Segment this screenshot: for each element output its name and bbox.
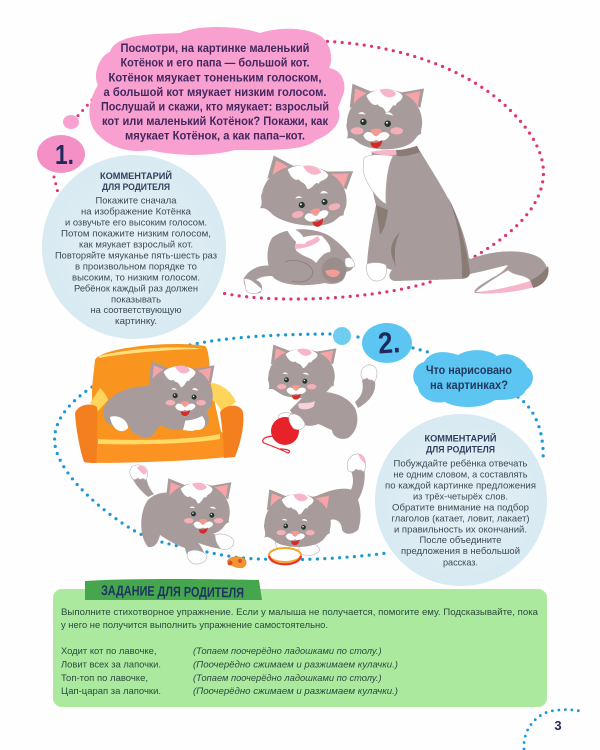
blue question text: на картинках? bbox=[430, 378, 508, 392]
yarn ball bbox=[263, 412, 305, 453]
illustration: kitten with milk bowl bbox=[264, 454, 366, 564]
verse action notes: (Топаем поочерёдно ладошками по столу.) bbox=[193, 646, 382, 657]
question text: кот или маленький Котёнок? Покажи, как bbox=[102, 114, 329, 128]
mouse kitten face bbox=[184, 507, 223, 534]
number badge 1 bbox=[37, 135, 85, 173]
number badge 2: 2. bbox=[377, 326, 401, 361]
comment text: Потом покажите низким голосом, bbox=[61, 228, 211, 238]
dotted connector: number 1 to comment bbox=[54, 177, 58, 193]
panel: task for the parent bbox=[53, 579, 547, 707]
comment text: из трёх-четырёх слов. bbox=[413, 491, 508, 501]
kitten face bbox=[288, 188, 343, 232]
blue question text bbox=[426, 363, 512, 392]
comment text: Покажите сначала bbox=[96, 195, 177, 205]
comment circle 1 bbox=[42, 155, 226, 339]
verse lines: Топ-топ по лавочке, bbox=[61, 673, 148, 684]
small blue bubble bbox=[333, 327, 351, 345]
big cat face bbox=[351, 112, 403, 148]
yarn kitten head bbox=[268, 345, 336, 398]
verse action notes bbox=[193, 646, 398, 697]
bowl kitten face bbox=[277, 519, 315, 545]
comment text: Ребёнок каждый раз должен bbox=[74, 283, 198, 293]
illustration: kitten with yarn bbox=[263, 345, 377, 453]
dotted path: section 2 bbox=[55, 334, 543, 560]
comment text: После объедините bbox=[420, 535, 502, 545]
number badge 1: 1. bbox=[55, 139, 74, 170]
illustration: kitten with mouse bbox=[130, 465, 247, 568]
comment heading bbox=[100, 170, 172, 193]
illustration: big cat bbox=[346, 84, 549, 293]
instruction text: Выполните стихотворное упражнение. Если у малыша не получается, помогите ему. Подсказывайте, пока bbox=[61, 607, 539, 618]
question text: мяукает Котёнок, а как папа–кот. bbox=[125, 129, 305, 143]
verse lines bbox=[61, 646, 161, 697]
comment text: и правильность их окончаний. bbox=[394, 524, 527, 534]
comment text: на изображение Котёнка bbox=[81, 207, 192, 217]
comment text: по каждой картинке предложения bbox=[385, 481, 536, 491]
comment text: глаголов (катает, ловит, лакает) bbox=[392, 513, 530, 523]
comment text: на соответствующую bbox=[90, 305, 182, 315]
comment text: и озвучьте его высоким голосом. bbox=[65, 217, 207, 227]
banner heading: ЗАДАНИЕ ДЛЯ РОДИТЕЛЯ bbox=[101, 582, 244, 600]
milk bowl bbox=[269, 548, 301, 564]
comment text: рассказ. bbox=[443, 557, 478, 567]
bowl kitten head bbox=[264, 489, 332, 547]
comment text: Побуждайте ребёнка отвечать bbox=[394, 458, 528, 468]
comment text: в произвольном порядке то bbox=[75, 262, 197, 272]
illustration: kitten on sofa bbox=[103, 361, 214, 437]
verse action notes: (Поочерёдно сжимаем и разжимаем кулачки.) bbox=[193, 686, 398, 697]
dotted connector: bubble to number 1 bbox=[67, 100, 92, 128]
question text: Котёнок мяукает тоненьким голоском, bbox=[108, 70, 322, 84]
banner heading bbox=[85, 579, 262, 600]
verse action notes: (Топаем поочерёдно ладошками по столу.) bbox=[193, 673, 382, 684]
comment text: предложения в небольшой bbox=[401, 546, 520, 556]
verse lines: Ловит всех за лапочки. bbox=[61, 660, 161, 670]
instruction text bbox=[61, 607, 539, 631]
comment circle 2 bbox=[375, 414, 547, 586]
speech cloud: pink question bbox=[89, 27, 344, 155]
comment heading: ДЛЯ РОДИТЕЛЯ bbox=[426, 444, 495, 456]
blue question text: Что нарисовано bbox=[426, 363, 512, 377]
sofa kitten head bbox=[146, 361, 214, 421]
question text: Котёнок и его папа — большой кот. bbox=[120, 56, 310, 70]
question text: Посмотри, на картинке маленький bbox=[120, 41, 310, 55]
comment text: показывать bbox=[111, 294, 161, 304]
comment text bbox=[385, 458, 536, 567]
comment heading bbox=[424, 432, 497, 456]
instruction text: у него не получится выполнить упражнение самостоятельно. bbox=[61, 620, 328, 631]
dotted path: section 1 bbox=[222, 41, 543, 299]
verse lines: Ходит кот по лавочке, bbox=[61, 646, 156, 657]
dotted arc around page number bbox=[524, 710, 580, 749]
question text bbox=[101, 41, 329, 143]
small thought bubble bbox=[63, 115, 79, 129]
yarn kitten face bbox=[277, 373, 316, 400]
page number: 3 bbox=[554, 718, 562, 733]
speech cloud: blue question bbox=[413, 350, 533, 407]
illustration: orange sofa bbox=[75, 344, 243, 463]
verse lines: Цап-царап за лапочки. bbox=[61, 686, 161, 697]
number badge 2 bbox=[362, 323, 412, 363]
comment text: высоким, то низким голосом. bbox=[72, 273, 200, 283]
comment text: не одним словом, а составлять bbox=[394, 469, 528, 479]
comment heading: КОММЕНТАРИЙ bbox=[100, 170, 172, 182]
kitten head bbox=[258, 154, 354, 231]
mouse kitten head bbox=[163, 478, 231, 536]
question text: Послушай и скажи, кто мяукает: взрослый bbox=[101, 100, 329, 114]
comment text bbox=[55, 195, 217, 326]
comment text: картинку. bbox=[115, 316, 157, 326]
illustration: small sitting kitten bbox=[244, 154, 355, 294]
verse action notes: (Поочерёдно сжимаем и разжимаем кулачки.) bbox=[193, 660, 398, 670]
comment heading: КОММЕНТАРИЙ bbox=[424, 432, 497, 444]
comment text: Повторяйте мяуканье пять-шесть раз bbox=[55, 251, 217, 261]
comment text: как мяукает взрослый кот. bbox=[79, 239, 193, 249]
comment heading: ДЛЯ РОДИТЕЛЯ bbox=[102, 182, 170, 193]
comment text: Обратите внимание на подбор bbox=[392, 502, 529, 512]
question text: а большой кот мяукает низким голосом. bbox=[104, 85, 326, 99]
sofa kitten face bbox=[165, 388, 206, 416]
big cat head bbox=[346, 84, 424, 149]
toy mouse bbox=[227, 556, 247, 568]
